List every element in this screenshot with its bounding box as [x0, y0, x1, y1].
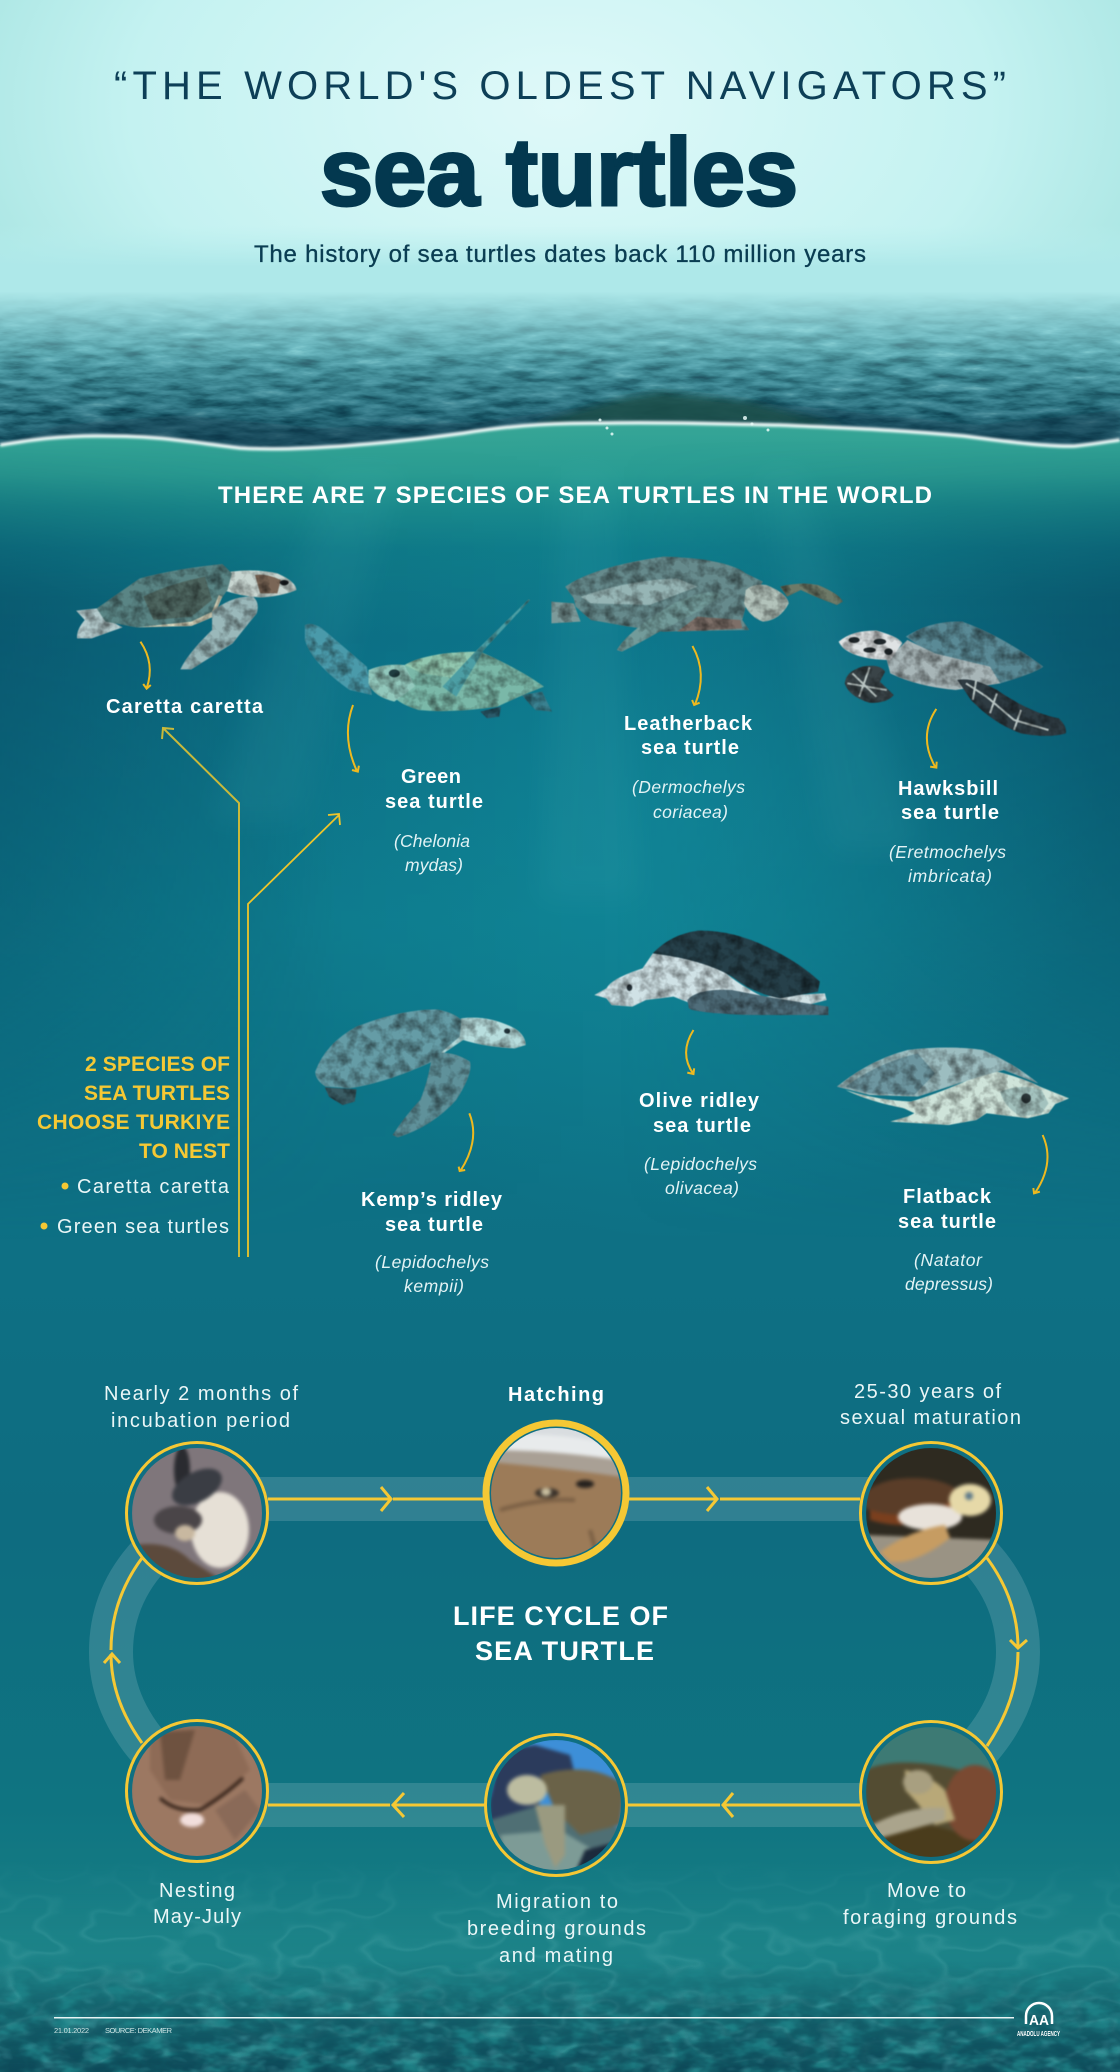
arrow: Hawksbill — [927, 709, 937, 768]
label: Kemp's ridley — [361, 1189, 503, 1296]
label: nesting: May-July — [153, 1906, 241, 1928]
footer rule — [54, 2017, 1014, 2035]
label: Kemp's ridley: sea turtle — [385, 1214, 483, 1236]
callout: nesting species: CHOOSE TURKIYE — [37, 1111, 230, 1134]
label: Green sea turtle — [385, 766, 483, 875]
label: foraging: foraging grounds — [843, 1907, 1017, 1929]
label: Olive ridley — [639, 1090, 760, 1198]
photo: foraging — [860, 1722, 1005, 1862]
label: Leatherback — [624, 713, 753, 822]
connector: Caretta caretta — [162, 728, 239, 1257]
turtle: Hawksbill — [839, 622, 1066, 736]
label: migration: breeding grounds — [467, 1918, 646, 1940]
subtitle: The history of sea turtles dates back 110 million years — [254, 241, 866, 268]
life cycle heading: SEA TURTLE — [475, 1636, 654, 1666]
label: Green sea turtle: Green — [401, 766, 461, 788]
kicker title: “THE WORLD'S OLDEST NAVIGATORS” — [114, 64, 1006, 108]
footer: date and source: 21.01.2022 — [54, 2026, 89, 2035]
label: sexual maturation: sexual maturation — [840, 1407, 1021, 1429]
logo: Anadolu Agency: AA — [1029, 2012, 1049, 2029]
label: Green sea turtle: mydas) — [405, 855, 463, 875]
label: Kemp's ridley: (Lepidochelys — [375, 1252, 489, 1272]
label: Leatherback: Leatherback — [624, 713, 753, 735]
arrow: Leatherback — [692, 646, 701, 705]
turtle: Olive ridley — [594, 931, 828, 1015]
turtle: Flatback — [837, 1047, 1069, 1125]
label: Hawksbill — [889, 778, 1006, 886]
label: Caretta caretta: Caretta caretta — [106, 696, 264, 718]
label: Flatback: sea turtle — [898, 1211, 996, 1233]
callout: nesting species: Green sea turtles — [57, 1216, 229, 1238]
turtle: Leatherback — [551, 557, 843, 652]
label: Leatherback: (Dermochelys — [632, 777, 745, 797]
life cycle heading — [453, 1601, 668, 1666]
label: sexual maturation: 25-30 years of — [854, 1381, 1001, 1403]
connector: Green sea turtle — [248, 814, 340, 1257]
label: Olive ridley: (Lepidochelys — [644, 1154, 757, 1174]
label: nesting: Nesting — [159, 1880, 235, 1902]
footer: date and source: SOURCE: DEKAMER — [105, 2026, 173, 2035]
label: Flatback — [898, 1186, 996, 1294]
life cycle heading: LIFE CYCLE OF — [453, 1601, 668, 1631]
photo: nesting — [126, 1720, 268, 1862]
label: Olive ridley: olivacea) — [665, 1178, 739, 1198]
label: migration — [467, 1891, 646, 1967]
label: Olive ridley: sea turtle — [653, 1115, 751, 1137]
arrow: Flatback — [1033, 1135, 1047, 1193]
photo: hatching — [485, 1423, 630, 1565]
life cycle: track — [104, 1487, 1027, 1817]
label: Flatback: Flatback — [903, 1186, 992, 1208]
label: Green sea turtle: sea turtle — [385, 791, 483, 813]
label: Hawksbill: Hawksbill — [898, 778, 998, 800]
turtle: Caretta caretta — [76, 564, 296, 669]
arrow: Caretta caretta — [140, 642, 151, 689]
logo: Anadolu Agency — [1017, 2003, 1060, 2038]
footer: date and source — [54, 2026, 173, 2035]
label: nesting — [153, 1880, 241, 1928]
logo: Anadolu Agency: ANADOLU AGENCY — [1017, 2031, 1060, 2038]
main title: sea turtles — [320, 119, 798, 226]
label: foraging — [843, 1880, 1017, 1929]
callout: nesting species: SEA TURTLES — [84, 1082, 230, 1105]
callout: nesting species: Caretta caretta — [77, 1176, 230, 1198]
label: foraging: Move to — [887, 1880, 966, 1902]
label: Hawksbill: imbricata) — [908, 866, 992, 886]
photo: sexual maturation — [860, 1442, 1002, 1584]
turtle: Kemp's ridley — [315, 1009, 526, 1137]
label: sexual maturation — [840, 1381, 1021, 1429]
label: migration: and mating — [499, 1945, 613, 1967]
turtle: Green sea turtle — [305, 599, 552, 718]
label: Flatback: depressus) — [905, 1274, 993, 1294]
label: incubation — [104, 1383, 298, 1432]
callout: nesting species: TO NEST — [139, 1140, 230, 1163]
label: Kemp's ridley: Kemp’s ridley — [361, 1189, 503, 1211]
label: Kemp's ridley: kempii) — [404, 1276, 464, 1296]
photo: incubation — [126, 1442, 268, 1585]
callout: nesting species — [37, 1053, 230, 1238]
label: Leatherback: coriacea) — [653, 802, 728, 822]
arrow: Green sea turtle — [348, 705, 359, 772]
header: title block — [114, 64, 1006, 268]
label: incubation: Nearly 2 months of — [104, 1383, 298, 1405]
photo: migration — [486, 1734, 626, 1876]
callout: nesting species: 2 SPECIES OF — [85, 1053, 230, 1076]
arrow: Olive ridley — [686, 1030, 694, 1074]
label: Flatback: (Natator — [914, 1250, 983, 1270]
heading: species: THERE ARE 7 SPECIES OF SEA TURTLES IN THE WORLD — [218, 482, 932, 509]
label: Hawksbill: (Eretmochelys — [889, 842, 1006, 862]
arrow: Kemp's ridley — [459, 1113, 473, 1171]
label: Green sea turtle: (Chelonia — [394, 831, 470, 851]
label: Hawksbill: sea turtle — [901, 802, 999, 824]
label: incubation: incubation period — [111, 1410, 290, 1432]
label: hatching: Hatching — [508, 1384, 604, 1406]
label: Olive ridley: Olive ridley — [639, 1090, 760, 1112]
label: Leatherback: sea turtle — [641, 737, 739, 759]
label: migration: Migration to — [496, 1891, 618, 1913]
